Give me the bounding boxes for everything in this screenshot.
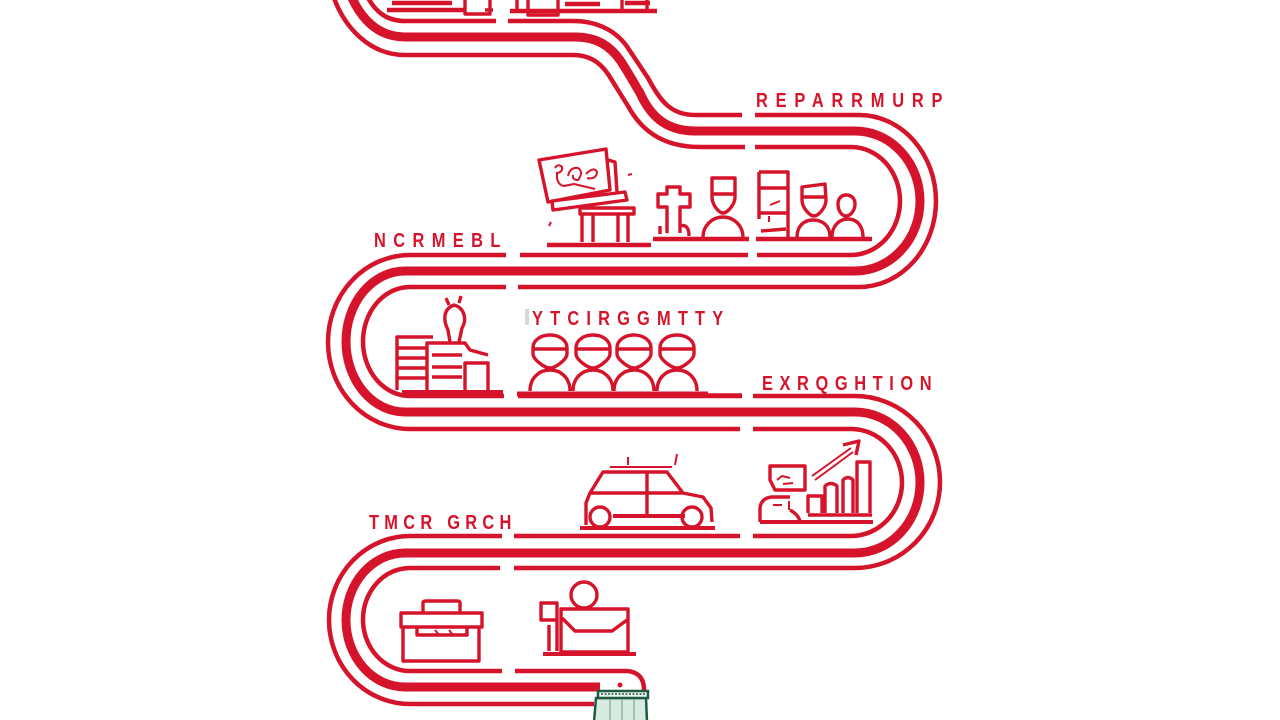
icon: person with envelope bbox=[541, 582, 636, 654]
road edge one bbox=[363, 0, 940, 690]
label: tmcr: TMCR GRCH bbox=[369, 510, 511, 533]
icon: car bbox=[580, 454, 715, 528]
person bbox=[614, 335, 654, 391]
person bbox=[657, 335, 697, 391]
icons: cropped top shelf bbox=[387, 0, 657, 15]
person three bbox=[832, 195, 863, 237]
person two bbox=[797, 184, 830, 237]
locker bbox=[759, 172, 788, 237]
icon: presentation board and desk bbox=[539, 149, 651, 245]
icon: four people bbox=[517, 335, 742, 395]
cross figure bbox=[658, 187, 690, 236]
person bbox=[530, 335, 570, 391]
label: ytoir with faded bar: YTCIRGGMTTY bbox=[532, 306, 724, 329]
icon: staff group bbox=[653, 172, 872, 239]
icon: green basket at road end bbox=[594, 682, 648, 720]
icon: growth chart with person bbox=[760, 441, 873, 522]
icon: buildings with statue bbox=[397, 296, 503, 393]
label: exro: EXRQGHTION bbox=[762, 371, 932, 394]
road edge two bbox=[328, 0, 902, 704]
road centre line bbox=[346, 0, 920, 687]
label: normal: NCRMEBL bbox=[374, 228, 500, 251]
person bbox=[573, 335, 613, 391]
person one bbox=[703, 178, 743, 237]
label: repar: REPARRMURP bbox=[756, 88, 942, 111]
winding road bbox=[328, 0, 940, 704]
icon: briefcase bbox=[401, 601, 482, 661]
